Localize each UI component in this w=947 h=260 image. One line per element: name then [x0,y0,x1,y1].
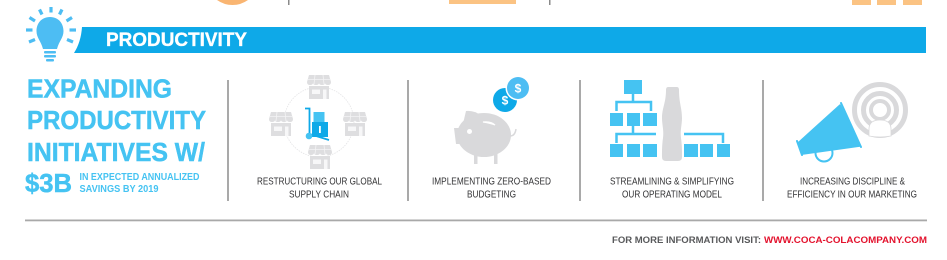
label: supply chain [257,176,382,200]
label: supply chain: SUPPLY CHAIN [289,188,349,200]
headline: expanding productivity initiatives: EXPANDING [27,74,172,104]
headline: expanding productivity initiatives: SAVINGS BY 2019 [80,184,159,195]
header banner [74,27,926,53]
icon: stores [269,75,367,169]
icon: bottle [662,87,682,161]
headline: expanding productivity initiatives: PRODUCTIVITY [27,105,206,135]
footer: more information: FOR MORE INFORMATION VISIT: [612,235,761,246]
panel: operating model [610,80,734,200]
label: budgeting: BUDGETING [467,188,516,200]
panel: supply chain [257,75,382,200]
footer: more information: WWW.COCA-COLACOMPANY.COM [764,235,927,246]
label: operating model [610,176,734,200]
headline: expanding productivity initiatives: IN EXPECTED ANNUALIZED [80,172,200,183]
headline: expanding productivity initiatives: $3B [25,168,72,198]
label: marketing: INCREASING DISCIPLINE & [800,176,905,188]
label: budgeting [432,176,551,200]
icon: org chart [610,80,730,157]
icon: dollar coins: $ [515,82,522,96]
icon: dollar coins: $ [502,94,509,108]
icon: dollar coins [493,76,530,112]
label: budgeting: IMPLEMENTING ZERO-BASED [432,176,551,188]
footer: more information [612,235,927,246]
label: operating model: OUR OPERATING MODEL [622,188,722,200]
label: supply chain: RESTRUCTURING OUR GLOBAL [257,176,382,188]
panel: zero-based budgeting [432,76,551,200]
label: operating model: STREAMLINING & SIMPLIFYING [610,176,734,188]
panel: marketing [787,84,917,200]
heading: productivity: PRODUCTIVITY [106,30,247,51]
headline: expanding productivity initiatives [25,74,206,198]
icon: megaphone [797,103,861,162]
icon: audience rings [854,84,906,137]
headline: expanding productivity initiatives: INITIATIVES W/ [27,137,205,167]
label: marketing [787,176,917,200]
icon: light bulb [26,7,76,62]
icon: piggy bank [454,111,516,164]
icon: hand truck [305,108,329,140]
top section remnants [217,0,922,5]
